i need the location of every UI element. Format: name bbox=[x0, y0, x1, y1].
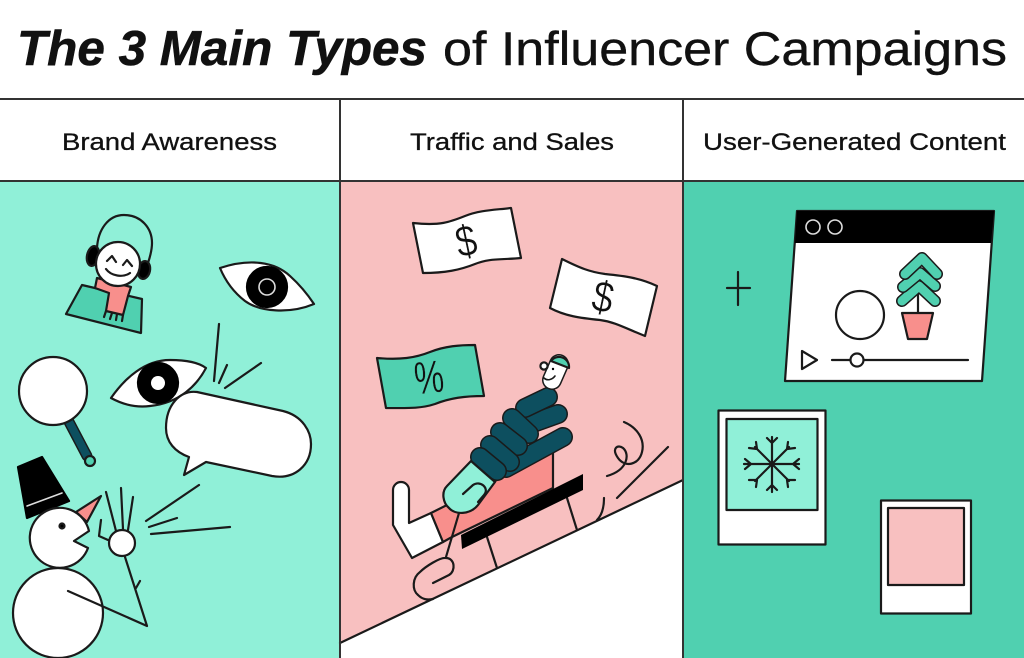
boot bbox=[393, 482, 443, 558]
polaroid with pink photo bbox=[881, 500, 971, 614]
window title bar bbox=[795, 211, 994, 243]
heading: Traffic and Sales: Traffic and Sales bbox=[410, 129, 614, 156]
icon: dollar bill one bbox=[413, 208, 521, 273]
window buttons bbox=[806, 220, 842, 234]
icon: dollar bill one: $ bbox=[451, 214, 482, 267]
plus sign bbox=[727, 272, 750, 305]
icon: sled rider bbox=[393, 357, 583, 600]
emphasis lines near eye bbox=[214, 324, 261, 388]
polaroid with snowflake bbox=[718, 410, 826, 544]
icon: percent bill: % bbox=[412, 351, 446, 405]
icon: person with earmuffs and scarf bbox=[66, 215, 152, 333]
rope loop bbox=[414, 513, 459, 600]
heading: Brand Awareness: Brand Awareness bbox=[62, 129, 277, 156]
sled runner bbox=[461, 474, 583, 549]
panel: traffic and sales bbox=[340, 181, 683, 658]
snow squiggle trail bbox=[597, 422, 668, 520]
mitten bbox=[443, 461, 495, 513]
title: The 3 Main Types bbox=[17, 22, 427, 76]
play button bbox=[802, 351, 817, 369]
mitten thumb bbox=[463, 483, 486, 502]
video player window bbox=[785, 211, 994, 381]
shout lines bbox=[146, 485, 230, 534]
panel: user-generated content bbox=[683, 181, 1024, 658]
icon: percent bill bbox=[377, 345, 484, 408]
progress slider bbox=[832, 354, 968, 366]
icon: snowflake bbox=[744, 437, 799, 492]
title bbox=[17, 22, 1007, 76]
heading: User-Generated Content: User-Generated Content bbox=[703, 129, 1006, 156]
icon: snowman bbox=[13, 457, 147, 658]
potted plant bbox=[902, 258, 937, 339]
sled body bbox=[431, 450, 553, 542]
title: of Influencer Campaigns bbox=[443, 22, 1007, 75]
icon: dollar bill two: $ bbox=[588, 271, 619, 323]
hill bbox=[340, 480, 683, 658]
sled legs bbox=[487, 498, 577, 568]
panel: brand awareness bbox=[0, 181, 340, 658]
icon: upper eye bbox=[220, 262, 314, 310]
sleeve rings bbox=[480, 418, 529, 471]
rider head bbox=[540, 357, 569, 380]
video circle bbox=[836, 291, 884, 339]
torso coat bbox=[506, 397, 563, 468]
icon: lower eye bbox=[111, 360, 206, 407]
icon: dollar bill two bbox=[550, 259, 657, 336]
speech bubble bbox=[166, 392, 311, 477]
icon: magnifying glass bbox=[19, 357, 95, 466]
